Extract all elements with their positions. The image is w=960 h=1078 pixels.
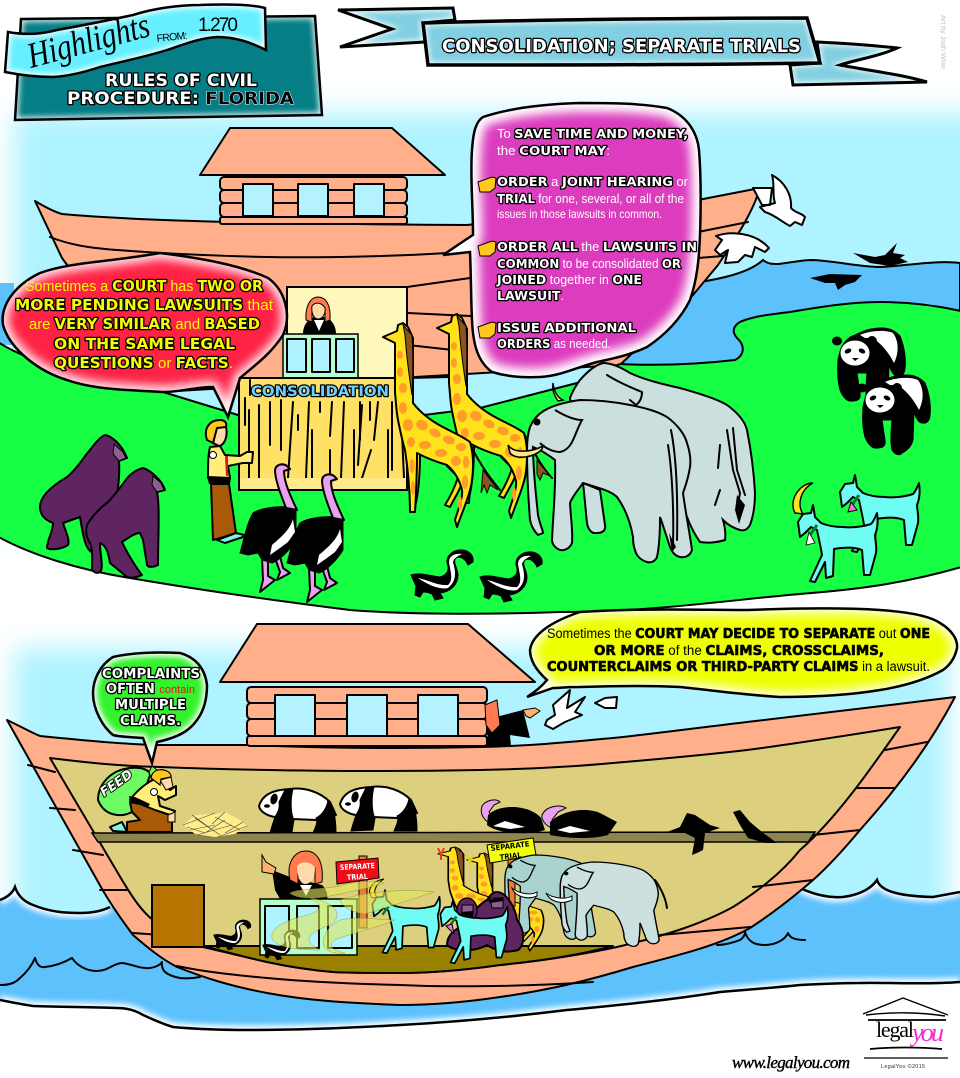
lower: red sign	[336, 856, 379, 928]
title ribbon: highlights	[5, 4, 266, 77]
upper scene: green hill	[0, 302, 960, 614]
lower: door	[152, 885, 204, 947]
title ribbon: highlights: 1.270	[198, 15, 238, 36]
speech bubble: green	[93, 652, 207, 763]
lower: kneeling officer	[110, 766, 176, 832]
speech bubble: purple	[443, 103, 701, 377]
lower: hay	[183, 812, 247, 837]
logo: legalyou: you	[909, 1018, 944, 1047]
lower: goats	[370, 879, 508, 963]
speech bubble: yellow: OR MORE of the CLAIMS, CROSSCLAIMS,	[594, 643, 884, 659]
speech bubble: yellow: Sometimes the COURT MAY DECIDE TO SEPARATE out ONE	[547, 626, 930, 642]
upper scene: ark	[35, 128, 760, 392]
speech bubble: purple: issues in those lawsuits in common.	[497, 207, 662, 221]
lower: yellow sign: SEPARATE	[490, 839, 530, 853]
lower: elephants	[505, 855, 667, 946]
speech bubble: purple: ORDER a JOINT HEARING or	[497, 174, 688, 189]
speech bubble: green: COMPLAINTS	[102, 667, 200, 682]
speech bubble: green: CLAIMS.	[120, 714, 181, 729]
lower: giraffes	[438, 847, 544, 951]
lower: skunks	[214, 920, 300, 960]
title ribbon: highlights: FROM:	[156, 30, 188, 45]
judge, upper scene	[303, 297, 336, 334]
shelf	[92, 832, 815, 842]
title panel: teal	[15, 16, 322, 120]
speech bubble: red: are VERY SIMILAR and BASED	[29, 315, 260, 333]
elephant, front	[508, 400, 692, 562]
speech bubble: purple: LAWSUIT.	[497, 288, 564, 303]
website address: www.legalyou.com	[732, 1053, 850, 1072]
lower scene: ark hull	[7, 697, 955, 1005]
lower: pandas	[259, 787, 417, 833]
sky background: lower scene	[14, 648, 948, 968]
goat horn	[793, 483, 813, 514]
speech bubble: purple: ORDERS as needed.	[497, 336, 611, 351]
speech bubble: yellow: COUNTERCLAIMS OR THIRD-PARTY CLAIMS in a lawsuit.	[547, 659, 930, 675]
topic banner	[338, 8, 927, 85]
pandas, upper right	[832, 328, 930, 455]
lower: resting ostriches	[481, 800, 617, 838]
gorilla, upper left	[40, 435, 127, 553]
hull planks	[28, 742, 927, 986]
lower: yellow sign	[487, 838, 536, 906]
speech bubble: yellow	[527, 608, 957, 697]
judicial bench with wood grain	[239, 378, 407, 490]
icon: gavel bullets	[478, 177, 496, 338]
witness stand, upper scene	[283, 334, 358, 378]
officer, upper scene	[206, 420, 253, 543]
speech bubble: purple: ORDER ALL the LAWSUITS IN	[497, 239, 697, 254]
lower: gorillas	[447, 892, 523, 952]
logo: legalyou	[863, 998, 948, 1070]
doves, lower scene	[545, 690, 617, 729]
lower scene: sea	[0, 880, 960, 1030]
logo: legalyou: LegalYou ©2015	[881, 1063, 925, 1070]
lower: skunk fumes	[272, 881, 434, 953]
floor	[204, 946, 613, 973]
speech bubble: purple: the COURT MAY :	[497, 143, 610, 158]
lower: judge	[262, 851, 327, 899]
gorilla, upper right	[86, 468, 165, 578]
lower: feed bag: FEED	[98, 767, 136, 800]
title panel: teal: RULES OF CIVIL	[105, 71, 257, 91]
lower ark: cabin	[220, 624, 535, 746]
lower: stand	[260, 899, 357, 955]
hull interior	[50, 727, 900, 973]
lower: red sign: TRIAL	[347, 872, 368, 882]
lower: yellow sign: TRIAL	[499, 850, 522, 862]
sky background: upper scene	[14, 113, 960, 533]
speech bubble: red: QUESTIONS or FACTS.	[54, 354, 233, 372]
title ribbon: highlights: Highlights	[22, 5, 154, 76]
elephant, back	[553, 363, 755, 543]
ark cabin logs	[220, 177, 407, 224]
upper scene: water	[0, 260, 960, 380]
speech bubble: green: OFTEN contain	[106, 682, 195, 697]
speech bubble: red	[3, 253, 287, 417]
speech bubble: green: MULTIPLE	[115, 698, 186, 713]
speech bubble: purple: TRIAL for one, several, or all of the	[497, 191, 684, 206]
goats	[793, 475, 920, 582]
wave lines	[35, 932, 805, 978]
speech bubble: red: Sometimes a COURT has TWO OR	[25, 277, 263, 295]
speech bubble: purple: ISSUE ADDITIONAL	[497, 320, 636, 335]
lower: black birds	[667, 810, 777, 855]
logo: legalyou: legal	[876, 1017, 914, 1042]
skunks, upper scene	[411, 550, 542, 602]
speech bubble: purple: COMMON to be consolidated OR	[497, 256, 681, 271]
lower: red sign: SEPARATE	[340, 861, 375, 872]
lower ark: roof	[220, 624, 535, 682]
speech bubble: purple: To SAVE TIME AND MONEY,	[497, 126, 688, 141]
ark windows	[243, 184, 384, 216]
label: consolidation: CONSOLIDATION	[251, 384, 389, 400]
speech bubble: red: ON THE SAME LEGAL	[54, 335, 235, 353]
artist credit: Art by Josh Wise	[939, 15, 948, 69]
speech bubble: purple: JOINED together in ONE	[496, 272, 642, 287]
woman in robe releasing doves	[485, 700, 540, 747]
lower: feed bag	[98, 767, 150, 815]
ostrich pair	[240, 464, 344, 602]
speech bubble: red: MORE PENDING LAWSUITS that	[15, 296, 274, 314]
doves and birds, upper scene	[715, 175, 908, 290]
title panel: teal: PROCEDURE: FLORIDA	[67, 89, 295, 109]
ark roof	[200, 128, 445, 175]
topic banner: CONSOLIDATION; SEPARATE TRIALS	[442, 36, 801, 57]
courtroom wall	[287, 287, 407, 382]
giraffes	[383, 314, 552, 527]
